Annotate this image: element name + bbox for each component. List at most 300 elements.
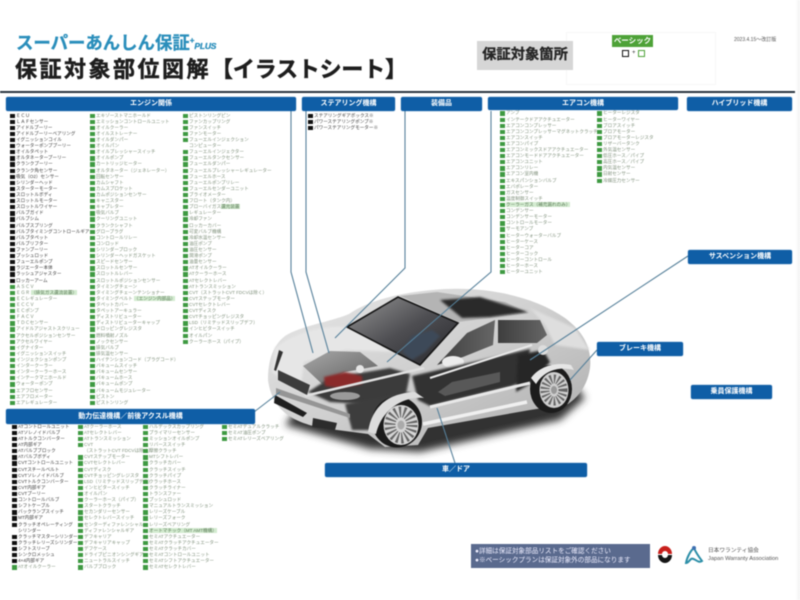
list: engine column 3: コンピューター [189, 143, 221, 148]
footer note: ●※ベーシックプランは保証対象外の部品になります [475, 557, 631, 564]
list: air conditioner column 1: ヒーターホース [506, 263, 538, 268]
list: drivetrain column 3: MTシフトレバー [149, 454, 183, 459]
list: drivetrain column 1: ATバルブブロック [18, 448, 56, 453]
list: engine column 1: エアフロメーター [16, 394, 53, 399]
list: drivetrain column 3: マニュアルトランスミッション [149, 503, 213, 508]
list: engine column 1: バルブスプリング [16, 223, 53, 228]
brand title: スーパーあんしん保証+PLUS [16, 33, 216, 53]
front wheel arch [368, 392, 424, 434]
bumper shade [276, 388, 350, 418]
list: engine column 1: バルブタイミングコントロールギア [16, 229, 90, 234]
list: air conditioner column 1: ヒーターコントロール [506, 257, 552, 262]
panel: air conditioner [486, 96, 680, 275]
list: engine column 2: シリンダーヘッドガスケット [96, 253, 156, 258]
list: engine column 1: オイルタペット [16, 149, 48, 154]
list: engine column 2: スロットルレバー [96, 271, 133, 276]
key markers: + [632, 50, 636, 56]
list: drivetrain column 3: セミATシフトアクチュエーター [149, 558, 214, 563]
list: drivetrain column 1: CVTソレノイドバルブ [18, 473, 64, 478]
list: steering: ステアリングギアボックス※ [314, 113, 374, 118]
list: air conditioner column 2 [596, 110, 654, 184]
list: engine column 2: オイルストレーナー [96, 131, 137, 136]
list: drivetrain column 1: クラッチオペレーティング [18, 522, 73, 527]
list: drivetrain column 2: ドライブピニオンシングギア [84, 552, 144, 557]
list: drivetrain column 1: MT内部ギア [18, 515, 43, 520]
heading: occupant protection [691, 385, 772, 399]
list: engine column 2: ピストン [96, 394, 114, 399]
plan key panel [566, 32, 716, 85]
basic plan tag: ベーシック [614, 36, 651, 45]
list: air conditioner column 1: ヒーターケース [506, 239, 538, 244]
list: engine column 2: シリンダーブロック [96, 247, 137, 252]
list: drivetrain column 2: ATトランスミッション [84, 436, 131, 441]
list: engine column 1: アクセルワイヤー [16, 339, 52, 344]
list: engine column 3: ファンカップリング [189, 119, 230, 124]
car illustration [268, 289, 590, 452]
list: drivetrain column 1: バックランプスイッチ [18, 509, 64, 514]
list: engine column 1: ウォーターポンプ [16, 381, 53, 386]
list: engine column 1: バルブタペット [16, 235, 48, 240]
list: engine column 3: ブローバイガス還元装置 [189, 204, 240, 209]
seat through windshield [402, 330, 440, 360]
list: engine column 1: イグニッションスイッチ [16, 351, 66, 356]
list: drivetrain column 2 [77, 424, 153, 571]
list: drivetrain column 3: セミATコントロールユニット [149, 552, 210, 557]
list: engine column 1: オルタネータープーリー [16, 155, 66, 160]
list: air conditioner column 2: 冷媒圧力センサー [603, 178, 640, 183]
list: air conditioner column 1: エアコンパイプ [506, 141, 538, 146]
list: drivetrain column 3: ミッションオイルポンプ [149, 436, 199, 441]
list: drivetrain column 3: セミATクラッチアクチュエーター [149, 540, 219, 545]
list: air conditioner column 1: エアコンスイッチ [506, 135, 543, 140]
list: drivetrain column 3: 摩擦クラッチ [149, 448, 177, 453]
list: drivetrain column 2: デフケース [84, 546, 107, 551]
list: engine column 3: 冷却水温センサー [189, 235, 226, 240]
list: engine column 1: バルブリフター [16, 241, 48, 246]
rear cutaway [516, 350, 550, 392]
list: engine column 2: クランクシャフト [96, 223, 133, 228]
list: engine column 1: スロットルボディ [16, 192, 52, 197]
list: drivetrain column 3: クラッチライナー [149, 485, 186, 490]
list: air conditioner column 1: ヒーターユニット [506, 269, 543, 274]
list: engine column 3: CVTセレクトレバー [189, 302, 230, 307]
list: engine column 2: スロットルセンサー [96, 265, 137, 270]
rear wheel arch [531, 364, 574, 384]
list: drivetrain column 1: コントロールバルブ [18, 497, 59, 502]
list: engine column 3: インヒビタースイッチ [189, 326, 235, 331]
list: drivetrain column 2: CVT [84, 442, 93, 447]
list: air conditioner column 1: エアコンユニット [506, 159, 543, 164]
list: drivetrain column 3: クラッチカバー [149, 460, 181, 465]
list: engine column 1: イグニッションコイル [16, 137, 62, 142]
list: engine column 2: バキュームモジュレーター [96, 388, 151, 393]
list: engine column 2: グロープラグ [96, 229, 123, 234]
list: engine column 2: エキゾーストマニホールド [96, 113, 151, 118]
list: engine column 1: アイドルプーリーベアリング [16, 131, 76, 136]
list: engine column 3: 冷却ファン [189, 216, 212, 221]
list: drivetrain column 1 [11, 424, 78, 571]
list: air conditioner column 2: 低圧ホース／パイプ [603, 153, 644, 158]
list: engine column 1: ロッカーアーム [16, 278, 48, 283]
list: drivetrain column 3: クラッチスイッチ [149, 467, 186, 472]
list: drivetrain column 1: クラッチマスターシリンダー [18, 534, 78, 539]
list: air conditioner column 1: エアコンモードドアアクチュエーター [506, 153, 584, 158]
list: engine column 3: フューエルインジェクター [189, 149, 244, 154]
list: engine column 1: インタークーラーホース [16, 369, 66, 374]
list: drivetrain column 2: バルブブロック [84, 564, 116, 569]
list: drivetrain column 1: シフトスリーブ [18, 546, 50, 551]
list: air conditioner column 1: エアコンリレー [506, 165, 538, 170]
heading: body and door: 車／ドア [442, 466, 470, 473]
engine cover [303, 351, 378, 384]
list: engine column 2: バキュームセンサー [96, 369, 137, 374]
list: engine column 3: フューエルプレッシャーレギュレーター [189, 168, 272, 173]
main title: 保証対象部位図解【イラストシート】 [15, 57, 407, 82]
list: engine column 3: ピストンリングピン [189, 113, 230, 118]
list: engine column 3: フロート（タンク内） [189, 198, 235, 203]
heading: brake [597, 342, 683, 356]
heading: steering: ステアリング機構 [320, 100, 376, 107]
ground shadow [285, 385, 585, 452]
list: engine column 1: ＡＳＣＶ [16, 284, 34, 289]
label: covered parts [477, 41, 573, 70]
basic plan tag [612, 35, 653, 47]
list: drivetrain column 2: センターディファレンシャル [84, 522, 143, 527]
list: drivetrain column 2: LSD（リミテッドスリップデフ） [84, 479, 153, 484]
list: engine column 1: ＬＡＦセンサー [16, 119, 48, 124]
list: engine column 1: ＴＤＣセンサー [16, 320, 48, 325]
list: engine column 2: オイルパン [96, 143, 119, 148]
list: engine column 2: エミッションコントロールユニット [96, 119, 170, 124]
list: engine column 1: ＥＣＵ [16, 113, 30, 118]
list: drivetrain column 3: クラッチホース [149, 479, 181, 484]
list: drivetrain column 3: プッシュロッド [149, 497, 181, 502]
rear shoulder [530, 308, 590, 350]
heading: suspension: サスペンション機構 [709, 253, 771, 260]
list: air conditioner column 1: コントロールモーター [506, 220, 552, 225]
list: engine column 2: タイミングベルト （エンジン内部品） [96, 296, 175, 301]
list: engine column 1: ＥＧＲ （排気ガス還流装置） [16, 290, 77, 295]
list: engine column 1: スロットルモーター [16, 198, 57, 203]
list: air conditioner column 2: ヒーターレジスタ [603, 110, 640, 115]
list: engine column 3: CVTディスク [189, 308, 216, 313]
list: engine column 2: オイルプレッシャースイッチ [96, 149, 156, 154]
hood [272, 327, 395, 392]
heading: air conditioner [488, 97, 678, 110]
list: drivetrain column 1: CVTコントロールユニット [18, 460, 73, 465]
list: air conditioner column 1: エアコンコンプレッサー [506, 123, 556, 128]
list: engine column 2: コントロールリレー [96, 235, 137, 240]
revision date: 2023.4.15〜改訂版 [734, 37, 776, 43]
list: engine column 1: クランク角センサー [16, 168, 57, 173]
list: engine column 2: スピードセンサー [96, 259, 133, 264]
list: engine column 2: ノックセンサー [96, 339, 128, 344]
heading: drivetrain: 動力伝達機構／前後アクスル機構 [78, 413, 183, 420]
list: drivetrain column 1: ATトルクコンバーター [18, 436, 65, 441]
label: covered parts: 保証対象箇所 [482, 47, 568, 63]
list: drivetrain column 1: クラッチレリーズシリンダー [18, 540, 78, 545]
list: engine column 2: 回転センサー [96, 174, 124, 179]
page edge [795, 0, 800, 600]
panel: steering [300, 96, 396, 131]
list: engine column 2: スロットルポジションセンサー [96, 278, 160, 283]
list: engine column 3: 油圧ポンプ [189, 241, 212, 246]
footer note: ●詳細は保証対象部品リストをご確認ください [475, 548, 611, 555]
list: air conditioner column 2: 外気温センサー [603, 147, 635, 152]
list: drivetrain column 3: トランスファー [149, 491, 181, 496]
panel: engine [4, 96, 298, 406]
list: drivetrain column 2: スタートクラッチ [84, 503, 121, 508]
list: engine column 2: 排気温センサー [96, 351, 128, 356]
list: air conditioner column 1: ヒーターウォーターバルブ [506, 233, 561, 238]
list: engine column 3: ファンモーター [189, 131, 221, 136]
list: engine column 2: ディストリビューターキャップ [96, 320, 160, 325]
list: engine column 1: スロットルワイヤー [16, 204, 57, 209]
list: engine column 1: ファンプーリー [16, 247, 48, 252]
list: engine column 3: ATセレクトレバー [189, 278, 227, 283]
list: engine column 3: フューエルインジェクション [189, 137, 249, 142]
key markers [621, 49, 646, 58]
list: drivetrain column 2: セレクトレバースイッチ [84, 515, 134, 520]
list: air conditioner column 1: ガスセンサー [506, 190, 534, 195]
list: engine column 1: バルブシム [16, 216, 39, 221]
list: drivetrain column 1: ATバルブボディ [18, 454, 51, 459]
list: air conditioner column 1: エアコン室内機 [506, 171, 538, 176]
association name [708, 546, 779, 562]
list: air conditioner column 2: 高圧ホース／パイプ [603, 159, 644, 164]
windshield [347, 297, 458, 365]
list: drivetrain column 2: （ストラットCVT FDCVは除く） [84, 448, 153, 453]
list: air conditioner column 2: 日射センサー [603, 171, 631, 176]
list: engine column 2: キャブレター [96, 204, 124, 209]
list: drivetrain column 3: クラッチパイプ [149, 473, 181, 478]
logo: association mark [684, 545, 704, 565]
fender dark zone [345, 392, 410, 430]
list: engine column 3: LSD（リミテッドスリップデフ） [189, 320, 258, 325]
list: engine column 1: ＦＡＣＶ [16, 314, 34, 319]
door lines [430, 345, 532, 378]
list: drivetrain column 2: CVTチョッピングレジスタ [84, 473, 139, 478]
list: air conditioner column 2: リザーバータンク [603, 141, 640, 146]
list: engine column 1: ＥＣポンプ [16, 308, 39, 313]
list: engine column 1: クランクプーリー [16, 161, 53, 166]
fog lamp [312, 418, 337, 430]
header rule [0, 90, 800, 93]
list: engine column 3: フューエルダンパー [189, 161, 230, 166]
list: drivetrain column 3: セミATセレクトレバー [149, 564, 196, 569]
list: engine column 1: バルブガイド [16, 210, 44, 215]
list: engine column 1: シリンダーヘッド [16, 180, 53, 185]
list: engine column 3: ATトランスミッション [189, 284, 236, 289]
list: drivetrain column 3 [142, 424, 219, 571]
list: drivetrain column 3: リバーススイッチ [149, 442, 186, 447]
front side window [437, 320, 495, 365]
list: engine column 2: コンロッド [96, 241, 119, 246]
list: engine column 2: ハイテンションコード（プラグコード） [96, 357, 179, 362]
list: air conditioner column 1: ヒーターコック [506, 251, 538, 256]
list: engine column 2: バキュームスイッチ [96, 363, 137, 368]
list: drivetrain column 1: 4×4内部ギア [18, 558, 44, 563]
list: air conditioner column 1: 温度制御スイッチ [506, 196, 543, 201]
list: engine column 2: ドロッピングレジスタ [96, 326, 142, 331]
list: air conditioner column 1: インテークドアアクチュエーター [506, 116, 575, 122]
list: drivetrain column 2: CVTセレクトレバー [84, 460, 125, 465]
list: engine column 3: ロッカーカバー [189, 223, 221, 228]
rear wheel [530, 365, 572, 413]
list: air conditioner column 2: ブロアモーター [603, 129, 635, 134]
association name: 日本ワランティ協会 [708, 548, 759, 554]
list: engine column 2: タペットカバー [96, 302, 128, 307]
list: engine column 3: フューエルタンクセンサー [189, 155, 244, 160]
list: engine column 2: バキュームポンプ [96, 381, 132, 386]
list: engine column 1: ＥＣレギュレーター [16, 296, 57, 301]
list: drivetrain column 2: ニュートラルスイッチ [84, 558, 130, 563]
leader lines [254, 111, 688, 463]
list: drivetrain column 1: AT内部ギア [18, 442, 42, 447]
list: engine column 3: ATクーラーホース [189, 271, 226, 276]
red engine [324, 372, 362, 388]
list: drivetrain column 2: クーラーホース（パイプ） [84, 497, 139, 502]
list: drivetrain column 3: セミATアクチュエーター [149, 534, 200, 539]
list: engine column 1: インテークマニホールド [16, 375, 67, 380]
list: air conditioner column 2: 内気温センサー [603, 165, 635, 170]
heading: hybrid: ハイブリッド機構 [712, 100, 767, 107]
list: engine column 2: 燃料噴射ノズル [96, 333, 128, 338]
list: drivetrain column 2: オイルパン [84, 491, 107, 496]
list: steering: パワーステアリングモーター※ [314, 125, 378, 130]
list: engine column 1: アクセルポジションセンサー [16, 333, 76, 338]
list: engine column 2: オイルダンパー [96, 137, 128, 142]
list: engine column 2: カムシャフト [96, 180, 124, 185]
car body [268, 289, 590, 447]
list: engine column 1: イグナイター [16, 345, 43, 350]
heading: drivetrain [6, 409, 255, 424]
list: engine column 3: CVTチョッピングレジスタ [189, 314, 244, 319]
heading: body and door [325, 463, 587, 477]
list: engine column 2: タペットアーキュラー [96, 308, 142, 313]
list: air conditioner column 1: ヒーターコア [506, 245, 534, 250]
list: engine column 1: エアフロセンサー [16, 388, 53, 393]
list: air conditioner column 1: エアコンコンプレッサーマグネットクラッチ [506, 129, 598, 134]
list: air conditioner column 2: ブロアスイッチ [603, 123, 635, 128]
roof glass [400, 292, 529, 322]
list: engine column 2: 排気バルブ [96, 345, 119, 350]
list: drivetrain column 1: CVTプーリー [18, 491, 46, 496]
list: engine column 1: エアレギュレーター [16, 400, 57, 405]
panel: drivetrain [4, 408, 284, 571]
hood lip strip [303, 367, 425, 397]
list: engine column 2: カートリッジヒーター [96, 161, 142, 166]
list: engine column 1: フューエルポンプ [16, 259, 53, 264]
list: engine column 2: クーリングユニット [96, 216, 137, 221]
list: engine column 3: フューエルポンプリレー [189, 180, 239, 185]
list: drivetrain column 2: CVTステップモーター [84, 454, 130, 459]
list: drivetrain column 2: デフキャリアキャップ [84, 540, 130, 545]
list: engine column 3: フューエルホース [189, 174, 226, 179]
list: engine column 3: オイルパン [189, 333, 212, 338]
list: engine column 1: アイドルプーリー [16, 125, 53, 130]
list: drivetrain column 2: デフキャリア [84, 534, 112, 539]
list: engine column 3: クーラーホース（パイプ） [189, 339, 244, 344]
heading: brake: ブレーキ機構 [619, 345, 661, 352]
list: engine column 1: スターターモーター [16, 186, 57, 191]
list: engine column 2: オイルポンプ [96, 155, 123, 160]
list: engine column 2: カムポジションセンサー [96, 192, 147, 197]
heading: equipment [401, 97, 482, 111]
heading: air conditioner: エアコン機構 [562, 100, 604, 107]
list: engine column 3: レギュレーター [189, 210, 221, 215]
list: air conditioner column 1: コンデンサーモーター [506, 214, 552, 219]
list: drivetrain column 1: ATオイルクーラー [18, 564, 56, 569]
list: drivetrain column 1: シフトケーブル [18, 503, 50, 508]
list: engine column 3: フューエルセンダーユニット [189, 186, 249, 191]
list: air conditioner column 1: クーラーガス（補充漏れのみ） [506, 202, 570, 207]
list: engine column 2: キャニスター [96, 198, 124, 203]
list: engine column 2: タイミングチェーンテンショナー [96, 290, 165, 295]
list: drivetrain column 3: オートマチック（MT AMT機構） [149, 528, 217, 533]
list: drivetrain column 2: ATセレクトレバー [84, 430, 122, 435]
list: engine column 2: ディストリビューター [96, 314, 142, 319]
list: engine column 1: インタークーラー [16, 363, 53, 368]
list: engine column 3: CVT（ストラットCVT FDCVは除く） [189, 290, 267, 295]
list: engine column 2: タイミングチェーン [96, 284, 137, 289]
heading: hybrid [687, 97, 792, 111]
grille [278, 370, 310, 395]
front wheel [372, 396, 422, 448]
list: drivetrain column 1: CVT内部ギア [18, 485, 46, 490]
heading: engine [6, 97, 296, 111]
rear side window [498, 320, 547, 343]
list: air conditioner column 1: アンプ [506, 110, 519, 115]
list: engine column 3: 油圧センサー [189, 247, 217, 252]
list: engine column 1 [9, 112, 90, 406]
list: steering [307, 112, 378, 131]
door cutaway [412, 349, 530, 406]
list: engine column 3: CVTステップモーター [189, 296, 235, 301]
list: engine column 2: ピストンリング [96, 400, 128, 405]
list: drivetrain column 4: セミATデュアルクラッチ [228, 424, 279, 429]
footer note [471, 544, 650, 568]
association name: Japan Warranty Association [708, 556, 778, 562]
list: engine column 2: オイルクーラー [96, 125, 128, 130]
list: drivetrain column 1: CVTスチールベルト [18, 467, 59, 472]
list: engine column 2: カムスプロケット [96, 186, 133, 191]
list: drivetrain column 1: シリンダー [18, 528, 41, 533]
list: air conditioner column 1: サーモアンプ [506, 226, 533, 231]
list: engine column 3: ブライオメーター [189, 192, 226, 197]
engine parts [330, 392, 360, 400]
engine bay dark [308, 368, 410, 406]
list: air conditioner column 1: コンデンサー [506, 208, 534, 213]
list: engine column 1: アイドルアジャストスクリュー [16, 326, 80, 331]
list: engine column 3: 潤滑ポンプ [189, 253, 212, 258]
list: air conditioner column 1: エバポレーター [506, 184, 538, 189]
list: engine column 3: ATオイルクーラー [189, 265, 227, 270]
list: air conditioner column 1: エキスパンションバルブ [506, 178, 557, 183]
list: engine column 2: オルタネーター（ジェネレーター） [96, 168, 170, 173]
list: engine column 3: ファンスイッチ [189, 125, 221, 130]
list: drivetrain column 2: ATクーラーホース [84, 424, 121, 429]
heading: equipment: 装備品 [431, 100, 452, 107]
lower grille [274, 395, 307, 417]
list: drivetrain column 2: CVTディスク [84, 467, 111, 472]
list: drivetrain column 1: ATコントロールユニット [18, 424, 69, 429]
list: drivetrain column 3: レリーズケーブル [149, 509, 185, 514]
list: engine column 2: 吸気バルブ [96, 210, 119, 215]
list: engine column 2 [89, 112, 179, 406]
list: engine column 1: ウォーターポンププーリー [16, 143, 71, 148]
list: engine column 1: ＥＣＣＶ [16, 302, 34, 307]
